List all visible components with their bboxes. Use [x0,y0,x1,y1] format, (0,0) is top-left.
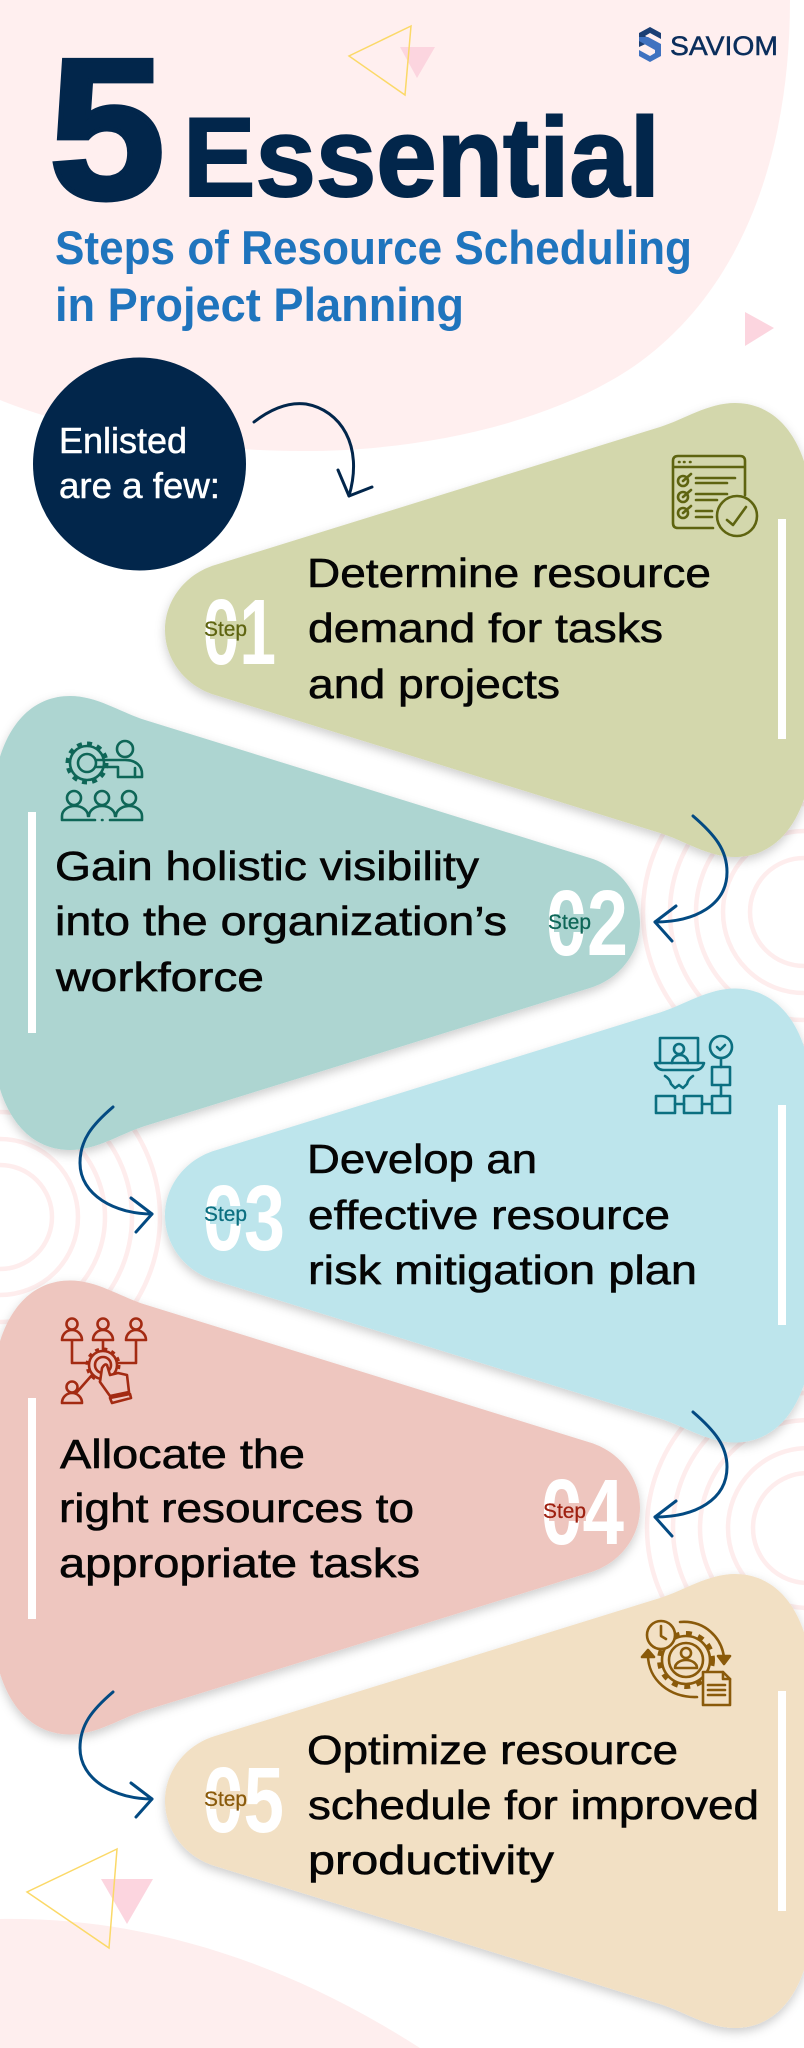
step 2 label: Step [548,911,591,934]
step 3 text: effective resource [308,1192,670,1238]
step 5 white bar [778,1691,786,1911]
step 2 number: 02 [546,871,628,975]
icon: allocate people with gear and hand [62,1318,146,1403]
step 2 text [55,843,507,1000]
step 5 text: productivity [308,1837,555,1883]
title: 5 Essential: 5 [49,18,165,241]
step 5 text [307,1727,759,1883]
step 5 number: 05 [203,1748,284,1852]
step 4 text [59,1431,420,1586]
step 1 white bar [778,519,786,739]
step 2 text: Gain holistic visibility [55,843,480,889]
step 5 text: Optimize resource [307,1727,678,1773]
step 1 text: Determine resource [307,550,711,596]
step 2 text: workforce [55,954,264,1000]
step 1 text: and projects [308,661,560,707]
step 4 white bar [28,1398,36,1619]
decorative rings: right upper [643,751,804,1073]
arrow: step 2 to step 3 [80,1107,152,1232]
decorative triangle: right pink [745,312,774,346]
background blob: top pink [0,0,790,451]
decorative rings: left [0,1057,160,1377]
logo: Saviom [639,27,778,62]
icon: checklist [673,456,757,536]
panel: step 4 [0,1280,640,1734]
logo: Saviom: SAVIOM [670,31,778,61]
decorative triangle: top yellow outline [349,26,411,95]
panel: step 3 [165,988,804,1442]
title: 5 Essential [49,18,660,241]
panel: step 1 [165,403,804,857]
step 4 text: right resources to [59,1485,414,1531]
subtitle: Steps of Resource Scheduling [55,221,692,274]
intro circle: Enlisted are a few [33,358,246,570]
step 2 text: into the organization’s [55,898,507,944]
subtitle [55,221,692,331]
icon: laptop workflow [655,1036,732,1113]
step 1 number: 01 [203,580,276,684]
decorative rings: right lower [647,1367,804,1689]
subtitle: in Project Planning [55,278,464,331]
step 2 white bar [28,812,36,1033]
decorative triangle: bottom pink [101,1879,153,1924]
step 3 number: 03 [203,1166,285,1270]
panel: step 2 [0,696,640,1150]
decorative triangle: top pink [400,47,435,78]
intro circle: Enlisted are a few: are a few: [59,465,220,506]
arrow: step 1 to step 2 [655,816,727,941]
step 1 text: demand for tasks [308,605,663,651]
arrow: intro to step 1 [254,404,372,496]
step 4 text: Allocate the [60,1431,305,1477]
decorative triangle: bottom yellow outline [27,1849,117,1948]
panel: step 5 [165,1574,804,2028]
step 3 text [307,1136,697,1293]
step 3 text: risk mitigation plan [308,1247,697,1293]
step 5 text: schedule for improved [308,1782,759,1828]
step 1 text [307,550,711,707]
arrow: step 4 to step 5 [80,1692,152,1817]
arrow: step 3 to step 4 [655,1412,727,1536]
step 5 label: Step [204,1788,247,1811]
step 4 text: appropriate tasks [59,1540,420,1586]
step 4 label: Step [543,1500,586,1523]
step 3 label: Step [204,1203,247,1226]
step 4 number: 04 [541,1460,624,1564]
background blob: bottom pink [0,1919,420,2048]
step 1 label: Step [204,618,247,641]
icon: gear person and team [62,741,142,820]
step 3 white bar [778,1105,786,1325]
step 3 text: Develop an [307,1136,537,1182]
intro circle: Enlisted are a few: Enlisted [59,420,187,461]
icon: clock gear person document [642,1621,730,1705]
title: 5 Essential: Essential [183,95,660,220]
